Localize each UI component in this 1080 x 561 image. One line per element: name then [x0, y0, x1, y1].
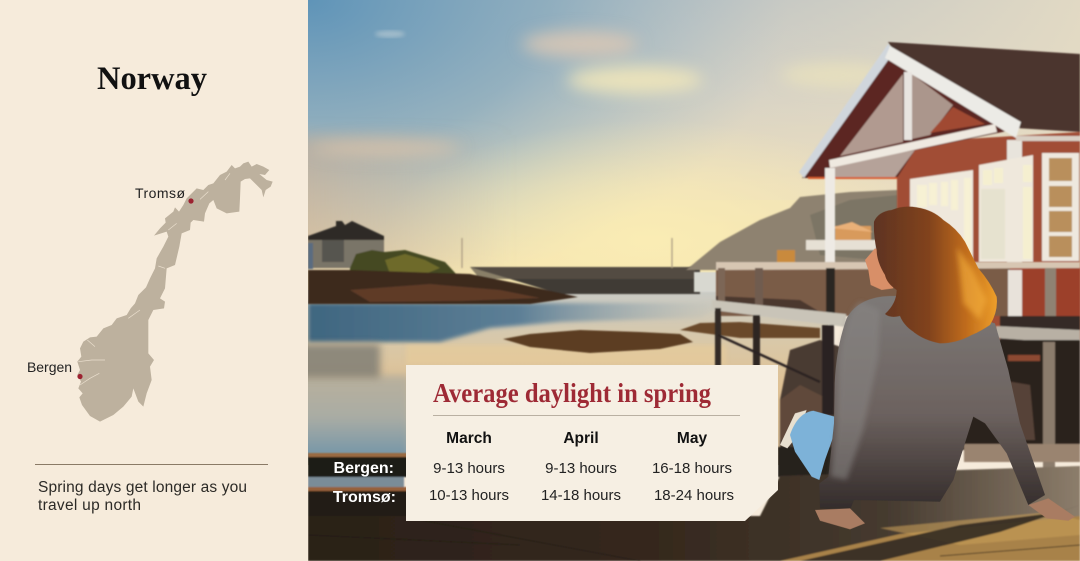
- row labels on the photo: Bergen:: [334, 460, 394, 477]
- column: March: 10-13 hours: [429, 487, 509, 504]
- column: May: [652, 430, 734, 504]
- photo: woman on a dock by a red cabin at sunset: [280, 0, 1080, 561]
- woman: left sleeve highlight: [831, 302, 880, 480]
- marker and label: Bergen: [27, 359, 83, 379]
- row labels on the photo: [333, 460, 396, 506]
- marker and label: Tromsø: Tromsø: [135, 185, 185, 201]
- column: April: 14-18 hours: [541, 487, 621, 504]
- panel: left map panel background: [0, 0, 308, 561]
- pier structure below the cabin: [712, 262, 1080, 472]
- column: March: 9-13 hours: [433, 460, 505, 477]
- cabin: gable: [802, 56, 1012, 178]
- column: April: [541, 430, 621, 504]
- row labels on the photo: Tromsø:: [333, 489, 396, 506]
- cabin: [799, 42, 1080, 340]
- woman: hands: [815, 498, 1075, 529]
- cabin: white fascia boards and beams: [799, 44, 894, 178]
- sky: [308, 0, 1080, 290]
- woman: sunlit hair highlight: [957, 247, 987, 320]
- column: April: 9-13 hours: [545, 460, 617, 477]
- heading: Average daylight in spring: Average daylight in spring: [433, 377, 711, 408]
- woman: jeans and sock: [780, 410, 835, 480]
- column: April: April: [563, 430, 599, 447]
- water: [296, 290, 828, 465]
- caption with rule: travel up north: [38, 497, 141, 514]
- caption with rule: [35, 464, 268, 514]
- cabin: windows: [910, 170, 973, 265]
- woman sitting, seen from behind: [780, 207, 1075, 529]
- caption with rule: Spring days get longer as you: [38, 479, 247, 496]
- column: March: [429, 430, 509, 504]
- cabin: roof: [888, 42, 1080, 132]
- woman: hair: [874, 207, 997, 343]
- woman: face: [865, 248, 893, 290]
- distant hill and buildings: [686, 190, 898, 292]
- map of Norway with city markers: [27, 162, 273, 422]
- column: May: May: [677, 430, 707, 447]
- map: country silhouette: [77, 162, 273, 422]
- shoreline with house and breakwater: [308, 221, 700, 304]
- foreground deck: [308, 447, 1080, 561]
- column: March: March: [446, 430, 492, 447]
- column: May: 18-24 hours: [654, 487, 734, 504]
- cabin: wall: [897, 132, 1080, 340]
- marker and label: Bergen: Bergen: [27, 359, 72, 375]
- panel: daylight table card: [406, 365, 778, 521]
- woman: sweater: [819, 296, 1045, 510]
- title: Norway: Norway: [97, 61, 207, 97]
- column: May: 16-18 hours: [652, 460, 732, 477]
